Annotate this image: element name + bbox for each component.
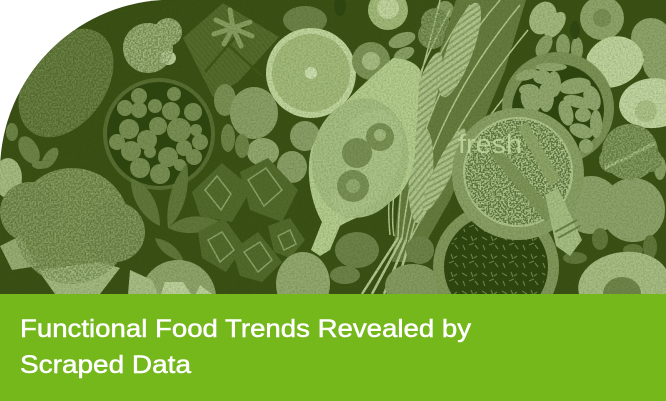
title band (0, 294, 666, 401)
rice bowl (433, 212, 559, 294)
pine cone cluster (192, 158, 305, 282)
tomato and almonds top (334, 0, 418, 80)
orange slice (266, 28, 356, 118)
sauce boat (302, 58, 420, 256)
vegetable surface texture (0, 0, 666, 294)
blueberry bowl (103, 78, 215, 190)
broccoli bottom left (0, 168, 145, 294)
almond bowl (502, 52, 614, 164)
quinoa bowl (452, 108, 584, 240)
wheat ears (408, 2, 481, 223)
quinoa grain texture (465, 119, 571, 225)
walnut bottom centre (385, 264, 439, 294)
bay leaves (131, 163, 222, 262)
pecans top (283, 6, 327, 34)
garlic clove left (0, 158, 22, 198)
broccoli floret top (418, 1, 454, 49)
pecans low right (563, 228, 657, 264)
wheat stalks (362, 0, 528, 294)
almonds above bowl (536, 21, 583, 58)
broccoli top (123, 18, 182, 73)
star anise (214, 10, 252, 46)
walnut halves near rice (330, 232, 434, 284)
scattered almonds left (6, 123, 58, 169)
wooden scoop (491, 122, 582, 256)
fresh lettering on bowl: fresh (458, 129, 522, 159)
chocolate bar (183, 3, 279, 97)
broccoli right (599, 124, 662, 180)
egg shaped fruit (276, 252, 330, 294)
title: Scraped Data (20, 351, 191, 379)
food photo with green duotone (0, 0, 666, 294)
avocado top left (18, 28, 114, 138)
walnut top right (529, 2, 566, 38)
title (20, 315, 472, 379)
fine noise texture (0, 0, 666, 294)
avocado half (578, 252, 666, 294)
round fruits right (562, 156, 666, 242)
title: Functional Food Trends Revealed by (20, 315, 472, 343)
wheat bundle backdrop (392, 0, 526, 262)
tomato half bottom (128, 260, 216, 294)
walnuts and almonds centre (214, 84, 320, 183)
carrots and garlic right (580, 0, 666, 128)
